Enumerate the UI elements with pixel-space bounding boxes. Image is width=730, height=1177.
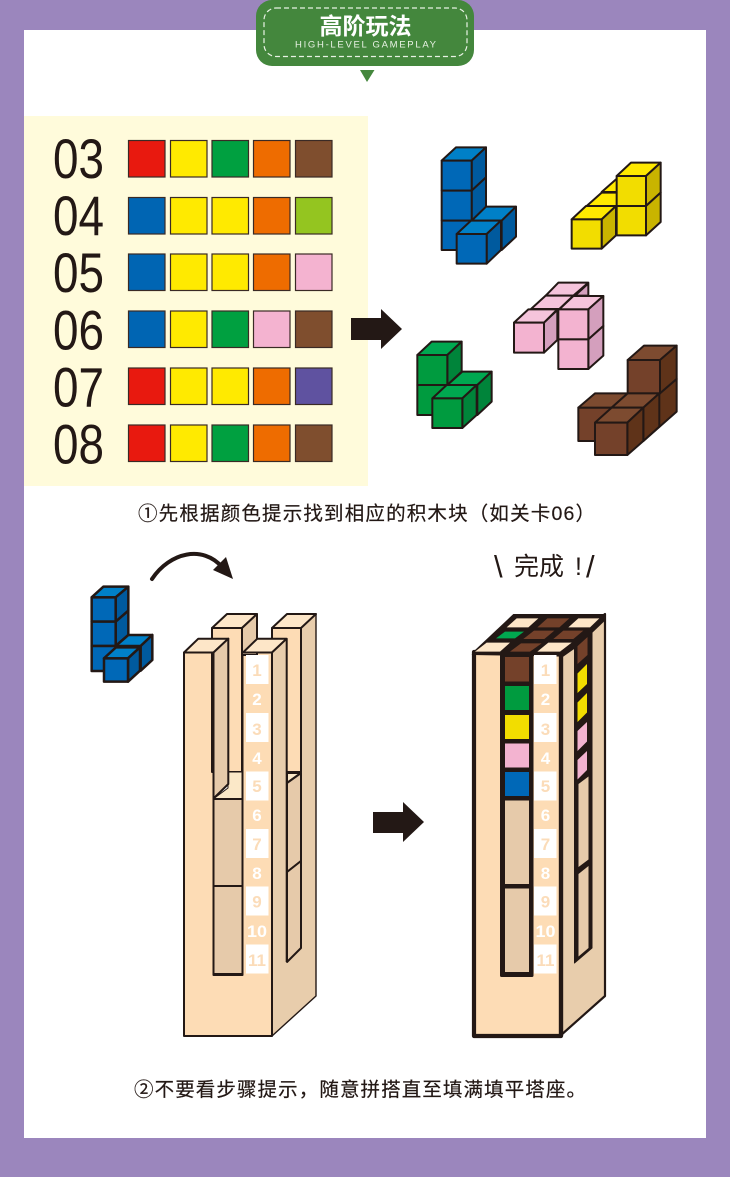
level numbers: 05	[53, 241, 104, 304]
icon: green block	[417, 342, 492, 428]
icon: pink block	[514, 283, 603, 369]
number strip: completed tower: 10	[536, 922, 556, 941]
number strip: completed tower	[534, 655, 556, 974]
icon: brown block	[578, 346, 677, 455]
icon: blue block	[442, 147, 516, 264]
completed tower corner edge	[559, 652, 563, 1036]
number strip: empty tower: 3	[252, 720, 262, 739]
level numbers: 08	[53, 412, 104, 476]
back right post	[272, 614, 316, 772]
title badge	[256, 0, 474, 66]
tower side face	[272, 614, 316, 1036]
subtitle: HIGH-LEVEL GAMEPLAY	[295, 40, 437, 50]
number strip: completed tower: 9	[541, 892, 550, 912]
caption: step 2: ②不要看步骤提示，随意拼搭直至填满填平塔座。	[134, 1079, 586, 1101]
arrow: curved	[152, 554, 233, 579]
level numbers: 06	[53, 298, 104, 362]
arrow: to completed tower	[373, 802, 424, 842]
number strip: empty tower: 5	[252, 777, 262, 796]
number strip: empty tower: 8	[252, 864, 262, 883]
icon: down triangle	[360, 70, 374, 82]
number strip: empty tower: 11	[248, 951, 266, 970]
text: complete: 完成	[514, 553, 564, 581]
number strip: completed tower: 1	[541, 661, 550, 680]
number strip: empty tower: 1	[252, 661, 262, 680]
completed front slot	[500, 652, 534, 977]
front right post	[243, 639, 287, 1036]
text: complete: \	[494, 549, 503, 584]
arrow: table to blocks	[351, 309, 402, 349]
level numbers	[53, 127, 104, 476]
front left post	[184, 639, 228, 798]
empty tower	[184, 614, 316, 1036]
level numbers: 03	[53, 127, 104, 190]
colour swatches	[128, 140, 332, 462]
number strip: completed tower: 2	[541, 690, 550, 709]
text: complete: /	[586, 549, 595, 584]
number strip: empty tower	[246, 655, 268, 974]
number strip: empty tower: 6	[252, 806, 262, 825]
completed top	[472, 614, 606, 657]
back left post	[212, 614, 257, 772]
number strip: empty tower: 10	[247, 922, 267, 941]
number strip: empty tower: 4	[252, 749, 262, 768]
level numbers: 07	[53, 356, 104, 418]
text: complete: !	[575, 553, 582, 581]
completed side slot	[574, 630, 592, 963]
completed front face	[474, 652, 561, 1036]
side slot	[287, 773, 301, 962]
icon: small blue block	[92, 587, 152, 682]
number strip: completed tower: 3	[541, 720, 550, 739]
number strip: completed tower: 6	[541, 806, 550, 825]
number strip: completed tower: 7	[541, 835, 550, 854]
number strip: completed tower: 8	[541, 864, 550, 883]
level numbers: 04	[53, 184, 104, 247]
icon: yellow block	[572, 163, 661, 249]
number strip: completed tower: 11	[536, 951, 554, 970]
number strip: empty tower: 9	[252, 892, 262, 912]
number strip: empty tower: 2	[252, 690, 262, 709]
panel: level colour table	[24, 116, 368, 486]
caption: step 1: ①先根据颜色提示找到相应的积木块（如关卡06）	[138, 503, 595, 525]
completed side face	[560, 614, 605, 1036]
completed tower	[472, 614, 606, 1036]
tower front face	[184, 652, 272, 1036]
number strip: completed tower: 4	[541, 749, 551, 768]
number strip: completed tower: 5	[541, 777, 550, 796]
front slot blocks	[214, 772, 242, 974]
title: 高阶玩法	[320, 13, 412, 39]
number strip: empty tower: 7	[252, 835, 262, 854]
text: complete	[494, 549, 595, 584]
